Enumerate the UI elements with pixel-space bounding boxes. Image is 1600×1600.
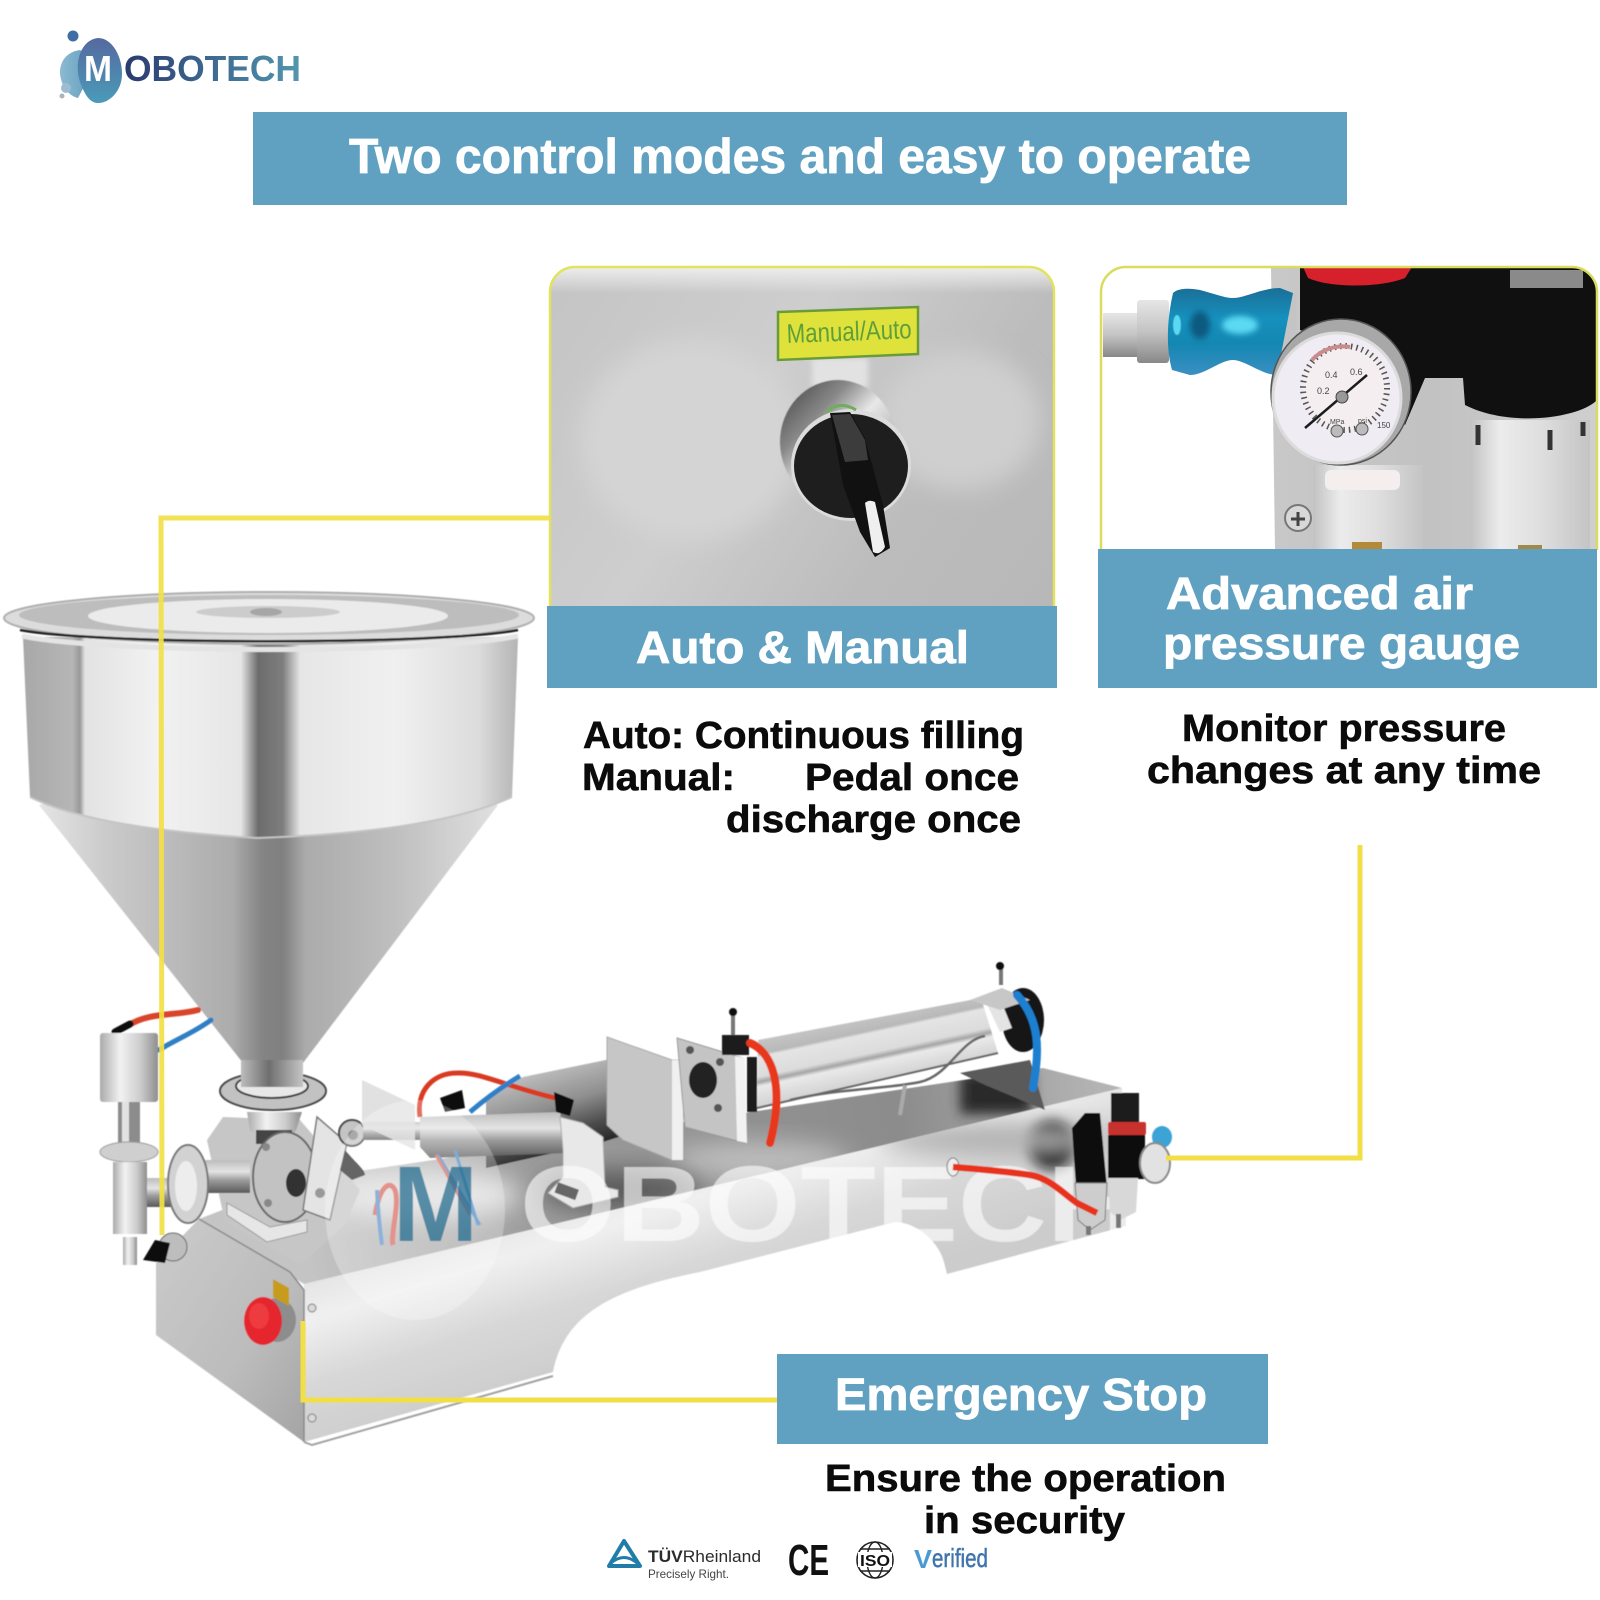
TUV Rheinland logo [609,1541,761,1581]
heading bar: Advanced air [1166,568,1473,619]
heading bar [777,1354,1268,1444]
description [825,1458,1226,1542]
description [582,715,1024,841]
machine illustration [4,592,1172,1445]
ISO globe: ISO [860,1553,890,1570]
reflections on top plate [320,1072,1032,1219]
description: Monitor pressure [1182,708,1506,750]
hopper [4,592,534,1091]
switch photo [550,267,1054,606]
logo: Mobotech [60,30,301,103]
panel: Emergency Stop [777,1354,1268,1542]
gauge photo [1101,267,1597,550]
switch label [778,307,918,360]
left dosing cylinder [100,1033,158,1265]
connector: pressure gauge [1166,845,1360,1158]
heading bar [547,606,1057,688]
machine front face [304,1088,1126,1442]
description: changes at any time [1147,750,1541,792]
front face reflections [880,1121,1120,1169]
discharge pipe and flange [143,1145,250,1263]
connector lines [161,518,1360,1400]
machine end face [156,1219,304,1442]
verified mark [914,1543,988,1574]
watermark: MOBOTECH: M [393,1143,478,1264]
logo: Mobotech: OBOTECH [124,48,301,89]
warning sticker [273,1279,289,1306]
title banner [253,112,1347,205]
second flange plate [677,1038,747,1143]
heading bar: Emergency Stop [835,1369,1207,1420]
connector: emergency stop [303,1321,777,1400]
watermark: MOBOTECH: OBOTECH [520,1143,1136,1264]
watermark: MOBOTECH [325,1100,1136,1320]
pressure gauge dial: psi [1358,418,1367,425]
TUV Rheinland logo: Precisely Right. [648,1567,729,1581]
pressure gauge dial: 0.2 [1317,386,1330,396]
TUV Rheinland logo: TÜVRheinland [648,1547,761,1566]
verified mark: V [914,1544,933,1574]
pressure gauge dial: 150 [1377,421,1391,430]
pressure gauge dial: 0.6 [1350,367,1363,377]
verified mark: erified [932,1543,988,1573]
CE mark: CE [788,1536,829,1585]
machine top plate [199,1068,1122,1284]
pressure gauge dial: MPa [1330,419,1344,426]
product cylinder [362,1037,683,1245]
pressure gauge dial [1271,319,1411,465]
valve housing [207,1060,420,1265]
panel: Advanced air pressure gauge [1098,267,1597,792]
title banner: Two control modes and easy to operate [349,130,1251,184]
certification logos [609,1536,988,1585]
air hoses to hopper [115,1010,211,1050]
switch label: Manual/Auto [786,314,912,349]
description: Auto: Continuous filling [583,715,1024,757]
ISO globe [857,1542,893,1578]
pressure gauge dial: 0.4 [1325,370,1338,380]
description: Pedal once [805,757,1019,799]
logo wordmark: M [84,48,112,89]
panel: Auto and Manual [547,267,1057,841]
description: in security [924,1500,1125,1542]
pneumatic cylinder [722,962,1045,1143]
description [1147,708,1541,792]
screws [308,1304,316,1422]
description: Manual: [582,757,735,799]
air regulator unit [947,1093,1172,1235]
description: Ensure the operation [825,1458,1226,1500]
connector: auto and manual to switch [161,518,550,1235]
heading bar [1098,549,1597,688]
heading bar: pressure gauge [1163,618,1520,669]
heading bar: Auto & Manual [636,622,969,673]
description: discharge once [726,799,1021,841]
logo droplet icon [60,30,122,103]
emergency stop button [244,1297,296,1345]
